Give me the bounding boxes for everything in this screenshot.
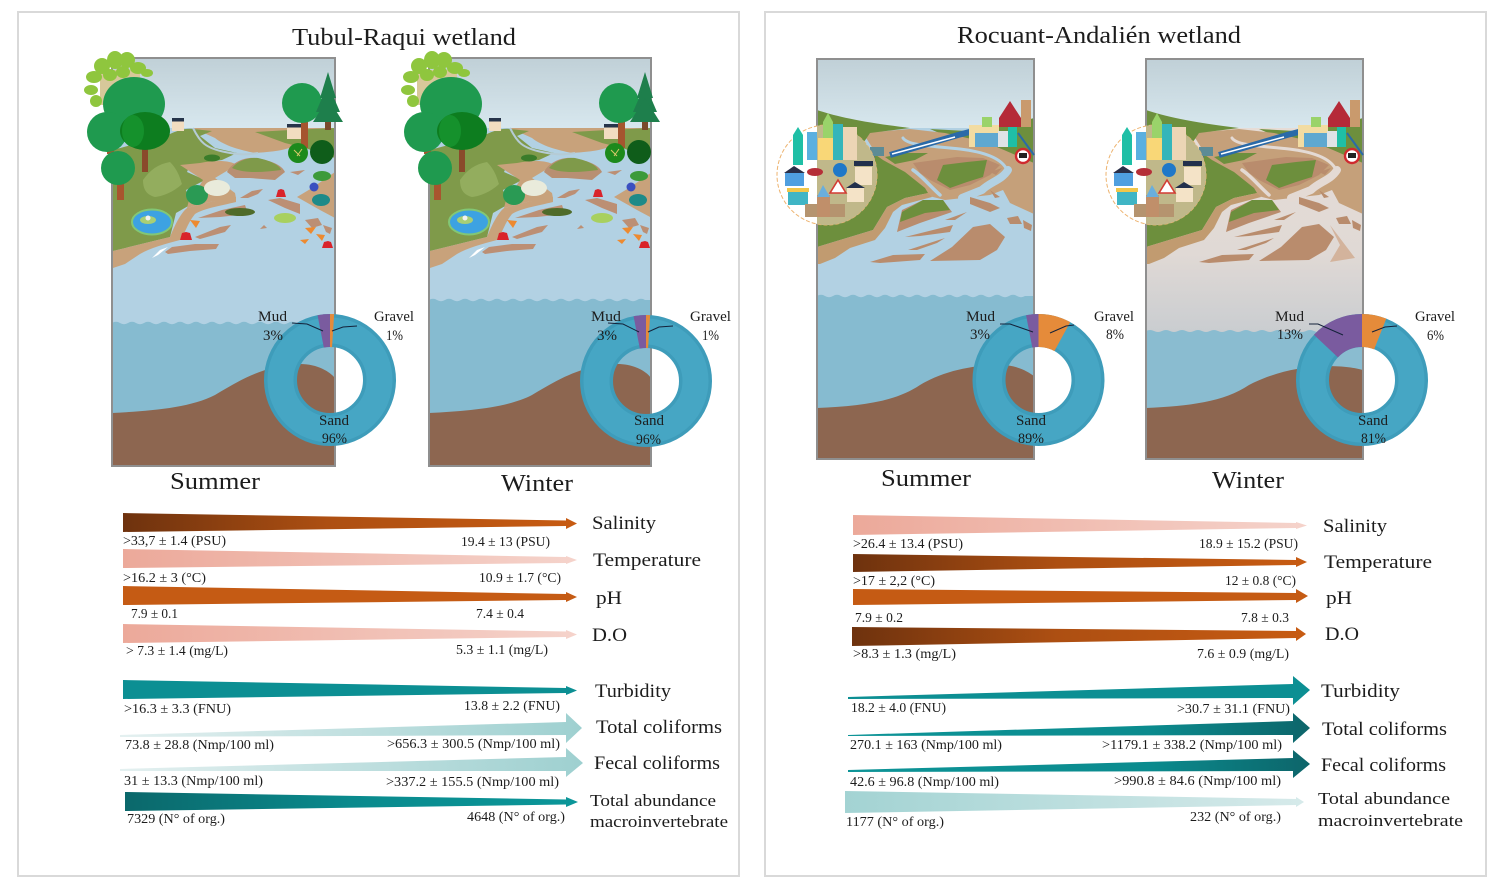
arrow: total abundance macroinvertebrate: 7329 (N° of org.) (127, 811, 225, 826)
arrow: temperature (123, 549, 701, 585)
donut: Tubul-Raqui winter sediment: 1% (702, 328, 719, 344)
donut: Rocuant-Andalién summer sediment: Gravel (1094, 309, 1134, 325)
arrow: total abundance macroinvertebrate: Total abundance (590, 791, 716, 810)
season labels (881, 466, 1284, 494)
arrow: dissolved oxygen (123, 624, 627, 658)
arrow: pH: pH (1326, 588, 1352, 609)
pale algae (274, 213, 296, 223)
sea bed (817, 365, 1034, 459)
green left hillside (817, 110, 928, 247)
deep water (1146, 330, 1363, 459)
icon: shrubs and flowers (186, 154, 331, 206)
donut: Rocuant-Andalién summer sediment (966, 309, 1134, 447)
arrow: pH: 7.9 ± 0.2 (855, 610, 903, 625)
arrow: total coliforms: 73.8 ± 28.8 (Nmp/100 ml) (125, 737, 274, 752)
scene: Tubul-Raqui winter (401, 51, 660, 466)
icon: tall green trees (87, 77, 170, 200)
deep water (429, 299, 651, 466)
dark green patch on flat (225, 208, 255, 216)
season labels: Summer (881, 466, 971, 492)
arrow: turbidity: Turbidity (595, 681, 672, 702)
arrow: salinity: 18.9 ± 15.2 (PSU) (1199, 536, 1298, 551)
arrow: dissolved oxygen: D.O (592, 625, 627, 646)
arrow: temperature: >16.2 ± 3 (°C) (123, 570, 206, 585)
donut: Rocuant-Andalién winter sediment (1275, 309, 1455, 447)
tan floodplain (863, 129, 1034, 214)
arrow: total abundance macroinvertebrate: macroinvertebrate (1318, 811, 1463, 830)
arrow: pH (853, 588, 1352, 625)
arrow: dissolved oxygen: 5.3 ± 1.1 (mg/L) (456, 642, 548, 657)
arrow: total coliforms: >1179.1 ± 338.2 (Nmp/100 ml) (1102, 737, 1282, 752)
donut: Rocuant-Andalién winter sediment: Sand (1358, 413, 1389, 429)
donut: Tubul-Raqui summer sediment: 96% (322, 431, 347, 447)
arrow: fecal coliforms: >990.8 ± 84.6 (Nmp/100 ml) (1114, 773, 1281, 788)
arrow: dissolved oxygen: 7.6 ± 0.9 (mg/L) (1197, 646, 1289, 661)
donut: Rocuant-Andalién summer sediment: Mud (966, 309, 996, 325)
trees overlapping the frame (401, 51, 660, 200)
arrow: total coliforms: Total coliforms (596, 717, 722, 738)
donut: Tubul-Raqui winter sediment (591, 309, 731, 448)
right green hillside (930, 118, 1034, 170)
donut: Rocuant-Andalién winter sediment: Gravel (1415, 309, 1455, 325)
sea bed (1146, 366, 1363, 459)
arrow: fecal coliforms: 31 ± 13.3 (Nmp/100 ml) (124, 773, 263, 788)
arrow: fecal coliforms (848, 750, 1446, 789)
arrow: total abundance macroinvertebrate: 4648 (N° of org.) (467, 809, 565, 824)
season labels: Winter (1212, 468, 1284, 494)
arrow: dissolved oxygen: >8.3 ± 1.3 (mg/L) (853, 646, 956, 661)
donut: Tubul-Raqui winter sediment: Mud (591, 309, 622, 325)
riverbank and river islands (817, 110, 1034, 264)
central island (227, 158, 285, 180)
season labels: Summer (170, 469, 260, 495)
title: Tubul-Raqui wetland: Tubul-Raqui wetland (292, 25, 516, 51)
scene frame (817, 59, 1034, 459)
arrow: total coliforms (120, 713, 722, 752)
arrow: dissolved oxygen: D.O (1325, 624, 1359, 645)
donut: Rocuant-Andalién summer sediment: 8% (1106, 327, 1124, 343)
arrow: turbidity: >16.3 ± 3.3 (FNU) (124, 701, 231, 716)
sea bed (429, 364, 651, 466)
arrow: fecal coliforms (120, 748, 720, 789)
arrow: turbidity (123, 680, 672, 716)
donut: Tubul-Raqui winter sediment: Gravel (690, 309, 731, 325)
arrow: temperature: Temperature (593, 550, 701, 571)
donut: Tubul-Raqui summer sediment: Gravel (374, 309, 414, 325)
arrow: turbidity: >30.7 ± 31.1 (FNU) (1177, 701, 1290, 716)
donut: Rocuant-Andalién winter sediment: Mud (1275, 309, 1305, 325)
donut: Tubul-Raqui summer sediment: Mud (258, 309, 288, 325)
scene: Tubul-Raqui summer (84, 51, 343, 466)
icon: red plants (180, 189, 333, 248)
donut: Tubul-Raqui winter sediment: 96% (636, 432, 661, 448)
title: Rocuant-Andalién wetland: Rocuant-Andalién wetland (957, 23, 1241, 49)
scene frame (112, 58, 335, 466)
light green patch (143, 162, 182, 197)
small tidal flats (165, 170, 332, 254)
trees overlapping the frame (84, 51, 343, 200)
arrow: salinity (853, 515, 1388, 551)
arrow: dissolved oxygen (852, 624, 1359, 661)
scene frame (429, 58, 651, 466)
arrow: pH: 7.4 ± 0.4 (476, 606, 524, 621)
illustration: farm and factories (969, 100, 1034, 163)
city, road and farm overlapping the frame (1106, 100, 1363, 225)
donut: Rocuant-Andalién summer sediment: 3% (970, 327, 990, 343)
arrow: temperature: 12 ± 0.8 (°C) (1225, 573, 1296, 588)
panel: Rocuant-Andalién wetland (765, 12, 1486, 876)
donut: Tubul-Raqui summer sediment (258, 309, 414, 447)
arrow: salinity: Salinity (592, 513, 657, 534)
arrow: total abundance macroinvertebrate (125, 791, 728, 831)
riverbank and river islands (113, 118, 335, 268)
arrow: total coliforms: 270.1 ± 163 (Nmp/100 ml) (850, 737, 1002, 752)
donut: Tubul-Raqui winter sediment: Sand (634, 413, 665, 429)
river islands (870, 168, 1032, 263)
season labels: Winter (501, 471, 573, 497)
arrow: turbidity: Turbidity (1321, 681, 1401, 702)
arrow: fecal coliforms: Fecal coliforms (1321, 755, 1446, 776)
scene frame (1146, 59, 1363, 459)
season labels (170, 469, 573, 497)
arrow: dissolved oxygen: > 7.3 ± 1.4 (mg/L) (126, 643, 228, 658)
arrow: salinity: 19.4 ± 13 (PSU) (461, 534, 550, 549)
central island (913, 157, 1000, 190)
donut: Tubul-Raqui summer sediment: Sand (319, 413, 350, 429)
sea bed (112, 364, 335, 466)
arrow: pH: 7.8 ± 0.3 (1241, 610, 1289, 625)
river channels (903, 138, 1008, 198)
panel: Tubul-Raqui wetland (18, 12, 739, 876)
arrow: salinity: >26.4 ± 13.4 (PSU) (853, 536, 963, 551)
arrow: total coliforms: Total coliforms (1322, 719, 1447, 740)
icon: road with traffic (807, 128, 985, 182)
arrow: fecal coliforms: >337.2 ± 155.5 (Nmp/100 ml) (386, 774, 559, 789)
arrow: total coliforms: >656.3 ± 300.5 (Nmp/100 ml) (387, 736, 560, 751)
arrow: salinity: >33,7 ± 1.4 (PSU) (123, 533, 226, 548)
scene: Rocuant-Andalién winter (1106, 59, 1363, 459)
deep water (817, 295, 1034, 459)
arrow: salinity (123, 513, 657, 549)
donut: Rocuant-Andalién winter sediment: 81% (1361, 431, 1386, 447)
arrow: turbidity (848, 676, 1401, 716)
icon: lily pond (132, 210, 172, 234)
donut: Rocuant-Andalién winter sediment: 13% (1277, 327, 1303, 343)
arrow: temperature: Temperature (1324, 552, 1432, 573)
pale sediment deposit (1330, 225, 1355, 262)
arrow: temperature (853, 552, 1432, 588)
donut: Rocuant-Andalién summer sediment: Sand (1016, 413, 1047, 429)
donut: Rocuant-Andalién summer sediment: 89% (1018, 431, 1044, 447)
arrow: turbidity: 18.2 ± 4.0 (FNU) (851, 700, 946, 715)
riverbank and river islands (430, 118, 652, 268)
tan shoreline (817, 193, 932, 264)
arrow: total abundance macroinvertebrate: Total abundance (1318, 789, 1450, 808)
city, road and farm overlapping the frame (777, 100, 1034, 225)
icon: houses (172, 118, 301, 139)
arrow: temperature: >17 ± 2,2 (°C) (853, 573, 935, 588)
deep water (112, 322, 335, 466)
donut: Tubul-Raqui summer sediment: 1% (386, 328, 403, 344)
arrow: total abundance macroinvertebrate: macroinvertebrate (590, 812, 728, 831)
arrow: total coliforms (848, 713, 1447, 752)
donut: Tubul-Raqui summer sediment: 3% (263, 328, 283, 344)
green streak (885, 153, 928, 164)
icon: orange plants (190, 220, 325, 244)
arrow: pH: 7.9 ± 0.1 (131, 606, 178, 621)
arrow: total abundance macroinvertebrate: 232 (N° of org.) (1190, 809, 1281, 824)
scene: Rocuant-Andalién summer (777, 59, 1034, 459)
arrow: temperature: 10.9 ± 1.7 (°C) (479, 570, 561, 585)
arrow: fecal coliforms: Fecal coliforms (594, 753, 720, 774)
arrow: pH (123, 586, 622, 621)
arrow: total abundance macroinvertebrate (845, 789, 1463, 830)
arrow: salinity: Salinity (1323, 516, 1388, 537)
arrow: turbidity: 13.8 ± 2.2 (FNU) (464, 698, 560, 713)
icon: pale green leafy tree (84, 51, 153, 107)
illustration: city district (777, 113, 877, 225)
riverbank and river islands (1146, 110, 1363, 264)
arrow: fecal coliforms: 42.6 ± 96.8 (Nmp/100 ml) (850, 774, 999, 789)
arrow: total abundance macroinvertebrate: 1177 (N° of org.) (846, 814, 944, 829)
arrow: pH: pH (596, 588, 622, 609)
donut: Tubul-Raqui winter sediment: 3% (597, 328, 617, 344)
icon: right tree, pine and round bushes (282, 72, 343, 164)
donut: Rocuant-Andalién winter sediment: 6% (1427, 328, 1444, 344)
